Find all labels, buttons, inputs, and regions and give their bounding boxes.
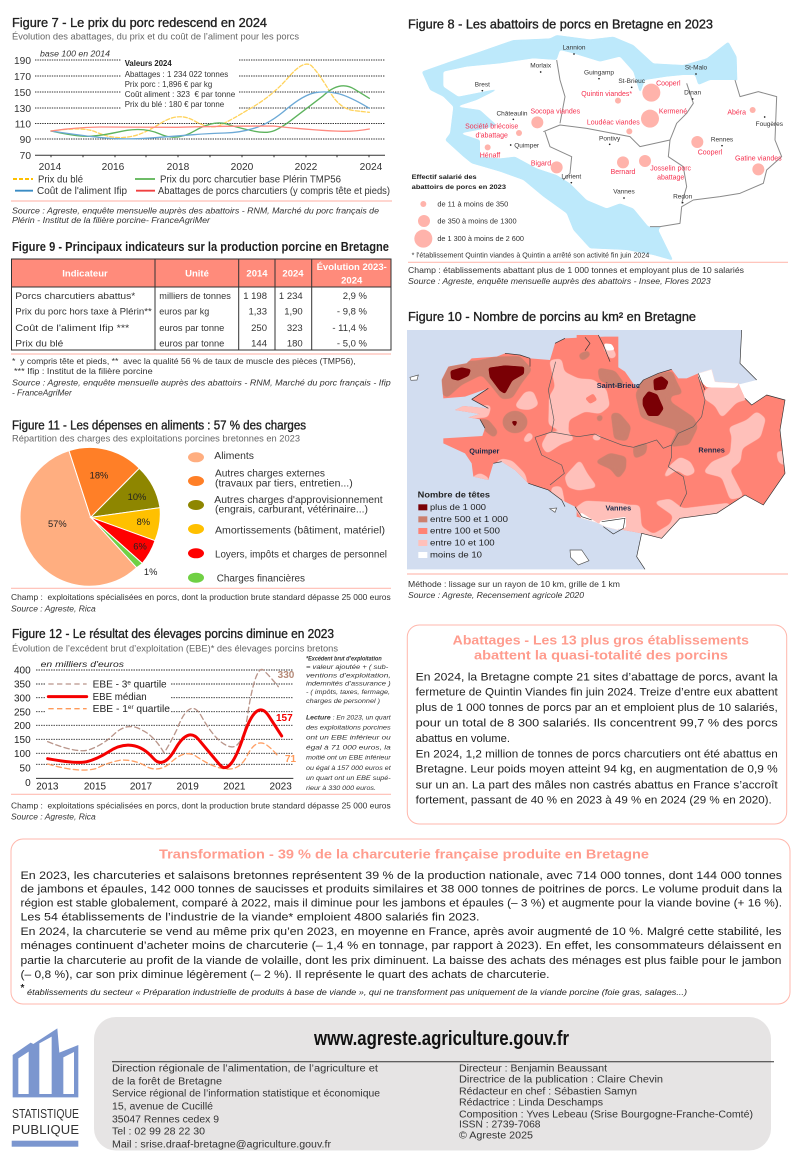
map: slaughterhouses in Brittany: Pontivy <box>599 135 621 142</box>
text block: publication credits: Rédactrice : Linda Deschamps <box>459 1098 603 1108</box>
map: slaughterhouses in Brittany: Quintin viandes* <box>581 91 632 98</box>
source: figure 10 <box>408 579 620 600</box>
map: slaughterhouses in Brittany: Quimper <box>514 143 540 150</box>
line chart: EBE quartiles: 400 <box>14 666 31 677</box>
map: slaughterhouses in Brittany: abattage <box>657 175 684 182</box>
line chart: indices base 100: 70 <box>20 151 31 162</box>
line chart: indices base 100: 2014 <box>39 162 62 173</box>
legend: employee count circles <box>412 174 649 259</box>
text block: processing box body: Les 54 établissements de l’industrie de la viande* emploient 4800 salariés fin 2023. <box>20 912 480 924</box>
legend: EBE: er <box>128 705 134 711</box>
legend: figure 7: Prix du blé <box>38 174 83 186</box>
legend: pie chart: (travaux par tiers, entretien...) <box>215 478 353 490</box>
legend: head count classes: entre 500 et 1 000 <box>430 514 508 524</box>
legend: pie chart: Amortissements (bâtiment, matériel) <box>215 526 385 537</box>
pie chart: charges: 8% <box>137 517 150 527</box>
text block: EBE definition and reading note: indemnités d’assurance ) <box>306 681 391 688</box>
text block: address: Direction régionale de l’alimentation, de l’agriculture et <box>112 1064 378 1074</box>
line chart: EBE quartiles: 2013 <box>36 781 59 792</box>
text block: slaughter box body: sur un an. La part des mâles non castrés abattus en France s’accroît <box>416 779 778 791</box>
text block: slaughter box body: pour un total de 8 300 salariés. Ils concentrent 99,7 % des porcs <box>416 718 778 730</box>
heading: slaughter box: Abattages - Les 13 plus gros établissements <box>453 632 749 648</box>
source: figure 12: Source : Agreste, Rica <box>11 812 96 822</box>
text block: processing box body: partie la charcuterie au profit de la viande de volaille, dont les prix diminuent. La baisse des achats des ménages est plus faible pour le jambon <box>20 955 782 967</box>
map: slaughterhouses in Brittany: Bernard <box>611 169 636 176</box>
map: slaughterhouses in Brittany: Bigard <box>531 161 551 168</box>
table: indicators: euros par tonne <box>159 323 224 334</box>
panel: figure 8 slaughterhouse map <box>408 18 788 286</box>
pie chart: charges: 18% <box>90 471 108 481</box>
notes and source: figure 9: - FranceAgriMer <box>12 388 73 398</box>
map: slaughterhouses in Brittany: Cooperl <box>698 150 723 157</box>
logo: Statistique Publique <box>12 1028 79 1147</box>
line chart: indices base 100: 90 <box>20 135 31 146</box>
legend: EBE: quartile <box>131 679 167 690</box>
table: indicators <box>12 259 391 350</box>
pie chart: charges: 57% <box>48 519 67 529</box>
table: indicators: Porcs charcutiers abattus* <box>15 291 136 302</box>
map: slaughterhouses in Brittany: St-Brieuc <box>618 78 646 85</box>
line chart: EBE quartiles: 157 <box>276 713 293 724</box>
line chart: indices base 100: 2018 <box>167 162 190 173</box>
table: indicators: 323 <box>287 323 303 334</box>
table: indicators: Coût de l'aliment Ifip *** <box>15 323 130 334</box>
line chart: indices base 100: 2020 <box>231 162 254 173</box>
map: slaughterhouses in Brittany: Gatine viandes <box>735 155 782 162</box>
text block: slaughter box body: fortement, passant de 40 % en 2023 à 49 % en 2024 (29 % en 2020). <box>416 795 772 807</box>
map: slaughterhouses in Brittany: Cooperl <box>656 81 681 88</box>
line chart: indices base 100 <box>14 48 385 173</box>
table: indicators: - 5,0 % <box>337 338 368 350</box>
legend: head count classes <box>418 490 508 560</box>
table: indicators: 1 198 <box>243 291 267 302</box>
source: figure 11: Source : Agreste, Rica <box>11 604 96 614</box>
line chart: EBE quartiles: 100 <box>14 749 31 760</box>
legend: EBE: quartile <box>134 704 170 715</box>
legend: pie chart: Aliments <box>214 451 254 462</box>
callout: 2024 values <box>125 58 235 109</box>
notes and source: figure 9: * y compris tête et pieds, ** avec la qualité 56 % de taux de muscle des pièces (TMP56), <box>12 356 356 366</box>
source: figure 10: Méthode : lissage sur un rayon de 10 km, grille de 1 km <box>408 579 620 589</box>
line chart: EBE quartiles: 150 <box>14 735 31 746</box>
text block: publication credits: Directeur : Benjamin Beaussant <box>459 1064 607 1074</box>
heading: figure 7: Figure 7 - Le prix du porc redescend en 2024 <box>12 16 267 30</box>
heading: slaughter box <box>453 632 749 662</box>
legend: head count classes: Nombre de têtes <box>418 490 491 499</box>
line chart: indices base 100: 2016 <box>102 162 125 173</box>
map: pigs per square kilometre: Saint-Brieuc <box>597 381 640 390</box>
line chart: EBE quartiles: 2015 <box>84 781 107 792</box>
text block: slaughter box body <box>416 671 779 807</box>
callout: 2024 values: Valeurs 2024 <box>125 58 172 68</box>
text block: publication credits: Directrice de la publication : Claire Chevin <box>459 1074 663 1086</box>
line chart: EBE quartiles: 2017 <box>130 781 153 792</box>
line chart: indices base 100: 190 <box>14 56 31 67</box>
table: indicators: 2024 <box>341 276 363 286</box>
table: indicators: 2,9 % <box>343 291 368 302</box>
callout: 2024 values: Prix porc : 1,896 € par kg <box>125 79 212 89</box>
panel: figure 9 indicators table <box>11 240 391 398</box>
line chart: indices base 100: base 100 en 2014 <box>40 48 110 58</box>
table: indicators: 2014 <box>246 268 268 280</box>
panel: figure 11 feed cost pie chart <box>11 418 391 614</box>
line chart: EBE quartiles: 300 <box>14 693 31 704</box>
map: slaughterhouses in Brittany: Rennes <box>711 137 734 144</box>
source: figure 12 <box>11 800 391 822</box>
map: slaughterhouses in Brittany: Lorient <box>561 174 581 181</box>
source: figure 8: Champ : établissements abattant plus de 1 000 tonnes et employant plus de 10 salariés <box>408 265 744 275</box>
legend: employee count circles: abattoirs de porcs en 2023 <box>412 184 506 191</box>
callout: 2024 values: Abattages : 1 234 022 tonnes <box>125 69 228 79</box>
map: slaughterhouses in Brittany: Redon <box>673 194 693 201</box>
text block: slaughter box body: abattus en volume. <box>416 733 510 745</box>
panel: figure 10 pig density map <box>400 310 800 600</box>
legend: pie chart: Charges financières <box>217 574 305 584</box>
text block: processing box body: En 2023, les charcuteries et salaisons bretonnes représentent 39 % de la production nationale, avec 714 000 tonnes, dont 144 000 tonnes <box>20 870 783 882</box>
table: indicators: milliers de tonnes <box>159 291 231 302</box>
text block: address: 15, avenue de Cucillé <box>112 1102 213 1112</box>
map: slaughterhouses in Brittany: Vannes <box>613 188 636 195</box>
map: slaughterhouses in Brittany: Josselin porc <box>650 166 692 173</box>
heading: figure 10: Figure 10 - Nombre de porcins au km² en Bretagne <box>408 310 696 324</box>
logo: Statistique Publique: STATISTIQUE <box>12 1106 79 1121</box>
map: slaughterhouses in Brittany: Société briécoise <box>465 123 518 130</box>
map: slaughterhouses in Brittany: Kermené <box>659 108 687 115</box>
pie chart: charges: 1% <box>144 567 157 577</box>
legend: pie chart: Autres charges d'approvisionnement <box>214 495 383 506</box>
line chart: indices base 100: 2024 <box>360 162 383 173</box>
text block: processing box body: (– 0,8 %), car son prix diminue légèrement (– 2 %). Il représente le quart des achats de charcuterie. <box>20 969 550 981</box>
text block: address <box>112 1064 380 1150</box>
table: indicators: euros par kg <box>159 307 209 318</box>
legend: pie chart: Autres charges externes <box>215 468 325 480</box>
line chart: EBE quartiles: 250 <box>14 707 31 718</box>
subtitle: figure 11: Répartition des charges des exploitations porcines bretonnes en 2023 <box>12 434 300 444</box>
line chart: EBE quartiles: 330 <box>278 670 295 681</box>
legend: figure 7: Coût de l'aliment Ifip <box>37 186 127 197</box>
text block: publication credits: ISSN : 2739-7068 <box>459 1120 541 1130</box>
map: pigs per square kilometre: Vannes <box>605 504 631 513</box>
line chart: indices base 100: 170 <box>14 72 31 83</box>
text block: address: Service régional de l’information statistique et économique <box>112 1088 380 1100</box>
text block: EBE definition and reading note: *Excédent brut d’exploitation <box>306 656 382 663</box>
text block: EBE definition and reading note: charges de personnel ) <box>306 698 380 705</box>
line chart: EBE quartiles: 0 <box>25 778 31 789</box>
legend: figure 7: Abattages de porcs charcutiers (y compris tête et pieds) <box>158 186 390 197</box>
line chart: indices base 100: 110 <box>15 120 31 130</box>
callout: 2024 values: Coût aliment : 323 € par tonne <box>125 89 235 99</box>
text block: publication credits: Composition : Yves Lebeau (Srise Bourgogne-Franche-Comté) <box>459 1110 753 1120</box>
text block: processing box body: de jambons et épaules, 142 000 tonnes de saucisses et produits similaires et 38 000 tonnes de poitrines de porcs. Le volume produit dans la <box>20 883 783 895</box>
line chart: EBE quartiles: 350 <box>14 680 31 691</box>
legend: head count classes: entre 10 et 100 <box>430 538 495 548</box>
legend: head count classes: entre 100 et 500 <box>430 526 500 536</box>
legend: EBE <box>48 679 170 715</box>
map: slaughterhouses in Brittany: d'abattage <box>475 132 508 139</box>
table: indicators: 1 234 <box>279 291 303 302</box>
source: figure 7 <box>12 206 379 225</box>
legend: employee count circles: de 11 à moins de 350 <box>437 202 508 209</box>
map: pigs per square kilometre <box>400 327 800 573</box>
heading: figure 8: Figure 8 - Les abattoirs de porcs en Bretagne en 2023 <box>408 18 713 32</box>
table: indicators: Prix du blé <box>15 338 63 350</box>
logo: Statistique Publique: PUBLIQUE <box>12 1122 79 1137</box>
table: indicators: euros par tonne <box>159 338 224 350</box>
map: slaughterhouses in Brittany: Morlaix <box>530 63 552 70</box>
pie chart: charges: 10% <box>128 492 146 502</box>
table: indicators: Évolution 2023- <box>317 262 387 273</box>
text block: address: de la forêt de Bretagne <box>112 1076 222 1088</box>
line chart: EBE quartiles: 71 <box>285 754 297 765</box>
text block: EBE definition and reading note: = valeur ajoutée + ( sub- <box>306 664 389 671</box>
panel: figure 12 EBE line chart <box>11 627 392 822</box>
legend: employee count circles: de 350 à moins de 1300 <box>437 219 517 226</box>
map: slaughterhouses in Brittany: Abéra <box>727 109 746 116</box>
text block: address: Mail : srise.draaf-bretagne@agriculture.gouv.fr <box>112 1140 332 1150</box>
map: slaughterhouses in Brittany: St-Malo <box>685 65 708 72</box>
map: slaughterhouses in Brittany: Loudéac viandes <box>587 120 640 127</box>
legend: head count classes: plus de 1 000 <box>430 502 486 512</box>
legend: EBE: e <box>127 680 132 686</box>
legend: employee count circles: Effectif salarié des <box>412 174 477 181</box>
text block: processing box body: ménages continuent d’acheter moins de charcuterie (– 1,4 % en tonnage, par rapport à 2023). En effet, les consommateurs délaissent en <box>20 940 782 952</box>
line chart: EBE quartiles: 50 <box>20 763 31 774</box>
callout: 2024 values: Prix du blé : 180 € par tonne <box>125 99 224 109</box>
legend: EBE: EBE médian <box>93 692 147 703</box>
legend: head count classes: moins de 10 <box>430 550 482 560</box>
text block: publication credits: © Agreste 2025 <box>459 1130 533 1142</box>
heading: figure 12: Figure 12 - Le résultat des élevages porcins diminue en 2023 <box>12 627 334 641</box>
map: slaughterhouses in Brittany: Hénaff <box>480 153 500 160</box>
legend: EBE: EBE - 3 <box>93 679 126 690</box>
source: figure 8: Source : Agreste, enquête mensuelle auprès des abattoirs - Insee, Flores 2023 <box>408 276 711 286</box>
footnote: processing box <box>20 983 687 997</box>
map: slaughterhouses in Brittany: Fougères <box>756 121 784 128</box>
table: indicators: 144 <box>251 338 267 350</box>
text block: slaughter box body: En 2024, 1,2 million de tonnes de porcs charcutiers ont été abattus en <box>416 748 778 760</box>
map: slaughterhouses in Brittany: Lannion <box>562 45 586 52</box>
map: pigs per square kilometre: Rennes <box>698 446 725 455</box>
heading: figure 11: Figure 11 - Les dépenses en aliments : 57 % des charges <box>12 418 306 432</box>
source: figure 10: Source : Agreste, Recensement agricole 2020 <box>408 590 584 600</box>
line chart: indices base 100: 2022 <box>295 162 318 173</box>
text block: slaughter box body: En 2024, la Bretagne compte 21 sites d’abattage de porcs, avant la <box>416 671 779 683</box>
line chart: EBE quartiles: 2023 <box>270 781 292 792</box>
text block: publication credits <box>459 1064 753 1142</box>
map: slaughterhouses in Brittany: Dinan <box>684 90 702 97</box>
source: figure 8 <box>408 265 744 286</box>
table: indicators: 250 <box>251 323 267 334</box>
map: slaughterhouses in Brittany: Socopa viandes <box>530 108 581 115</box>
heading: processing box: Transformation - 39 % de la charcuterie française produite en Bretagne <box>159 846 649 862</box>
notes and source: figure 9 <box>12 356 391 398</box>
source: figure 12: Champ : exploitations spécialisées en porcs, dont la production brute standard dépasse 25 000 euros <box>11 800 391 810</box>
table: indicators: 180 <box>287 338 303 350</box>
subtitle: figure 7: Évolution des abattages, du prix et du coût de l’aliment pour les porcs <box>12 32 299 42</box>
text block: EBE definition and reading note: - ( impôts, taxes, fermage, <box>306 689 390 696</box>
table: indicators: 2024 <box>282 268 304 280</box>
line chart: EBE quartiles <box>14 659 297 792</box>
text block: slaughter box body: Bretagne. Leur poids moyen atteint 94 kg, en augmentation de 0,9 % <box>416 764 778 776</box>
text block: EBE definition and reading note: rieur à 330 000 euros. <box>306 785 376 792</box>
source: figure 7: Plérin - Institut de la filière porcine- FranceAgriMer <box>12 215 211 225</box>
map: slaughterhouses in Brittany: Brest <box>475 81 490 88</box>
map: slaughterhouses in Brittany: Châteaulin <box>496 110 528 117</box>
text block: address: 35047 Rennes cedex 9 <box>112 1114 219 1126</box>
legend: pie chart: (engrais, carburant, vétérinaire...) <box>215 504 368 516</box>
panel: slaughter text box <box>407 625 787 824</box>
table: indicators: Unité <box>185 268 209 280</box>
website address: www.agreste.agriculture.gouv.fr <box>313 1028 569 1050</box>
text block: EBE definition and reading note: un quart ont un EBE supé- <box>306 775 391 782</box>
line chart: EBE quartiles: en milliers d'euros <box>41 659 124 669</box>
legend: pie chart <box>188 451 387 584</box>
text block: EBE definition and reading note: égal à 71 000 euros, la <box>306 745 391 752</box>
text block: address: Tel : 02 99 28 22 30 <box>112 1126 205 1138</box>
text block: EBE definition and reading note: ou égal à 157 000 euros et <box>306 765 392 772</box>
text block: publication credits: Rédacteur en chef : Sébastien Samyn <box>459 1086 637 1098</box>
heading: slaughter box: abattent la quasi-totalité des porcins <box>474 648 728 662</box>
panel: processing text box <box>11 839 790 1004</box>
table: indicators: 1,90 <box>284 307 303 318</box>
footnote: processing box: établissements du secteur « Préparation industrielle de produits à base de viande », qui ne transforment pas uniquement de la viande porcine (foie gras, salages...) <box>27 987 687 997</box>
table: indicators: Indicateur <box>62 268 108 280</box>
source: figure 11 <box>11 592 391 614</box>
panel: footer contact block <box>94 1017 774 1150</box>
text block: slaughter box body: plus de 1 000 tonnes de porcs par an et emploient plus de 10 salariés, <box>416 702 778 714</box>
source: figure 11: Champ : exploitations spécialisées en porcs, dont la production brute standard dépasse 25 000 euros <box>11 592 391 602</box>
text block: EBE definition and reading note: ont un EBE inférieur ou <box>306 735 391 742</box>
line chart: EBE quartiles: 2021 <box>223 781 246 792</box>
source: figure 7: Source : Agreste, enquête mensuelle auprès des abattoirs - RNM, Marché du porc français de <box>12 206 379 216</box>
text block: EBE definition and reading note: des exploitations porcines <box>306 725 391 732</box>
text block: EBE definition and reading note: Lecture : En 2023, un quart <box>306 714 392 721</box>
line chart: EBE quartiles: 200 <box>14 721 31 732</box>
legend: EBE: EBE - 1 <box>93 704 126 715</box>
text block: processing box body: région est stable globalement, comparé à 2022, mais il diminue pour les jambons et épaules (– 3 %) et augmente pour la viande bovine (+ 16 %). <box>20 898 782 910</box>
text block: EBE definition and reading note: moitié ont un EBE inférieur <box>306 755 391 762</box>
pie chart: charges <box>20 447 160 586</box>
legend: employee count circles: * l'établissement Quintin viandes à Quintin a arrêté son activité fin juin 2024 <box>412 252 649 259</box>
footnote: processing box: * <box>20 983 24 994</box>
legend: employee count circles: de 1 300 à moins de 2 600 <box>437 236 524 243</box>
table: indicators: - 9,8 % <box>337 307 368 318</box>
line chart: indices base 100: 130 <box>14 104 31 115</box>
text block: slaughter box body: fermeture de Quintin Viandes fin juin 2024. Treize d’entre eux abattent <box>416 687 778 699</box>
text block: EBE definition and reading note: ventions d’exploitation, <box>306 672 391 679</box>
heading: figure 9: Figure 9 - Principaux indicateurs sur la production porcine en Bretagne <box>12 240 389 254</box>
pie chart: charges: 6% <box>133 541 147 551</box>
legend: figure 7: Prix du porc charcutier base Plérin TMP56 <box>160 174 341 186</box>
legend: figure 7 <box>13 174 390 197</box>
panel: figure 7 pork price line chart <box>11 16 392 225</box>
notes and source: figure 9: Source : Agreste, enquête mensuelle auprès des abattoirs - RNM, Marché du porc français - Ifip <box>12 378 391 388</box>
line chart: EBE quartiles: 2019 <box>177 781 199 792</box>
text block: processing box body <box>20 870 783 981</box>
notes and source: figure 9: *** Ifip : Institut de la filière porcine <box>14 366 153 376</box>
legend: pie chart: Loyers, impôts et charges de personnel <box>215 550 387 560</box>
map: slaughterhouses in Brittany: Guingamp <box>584 69 614 76</box>
table: indicators: Prix du porc hors taxe à Plérin** <box>15 307 152 318</box>
table: indicators: - 11,4 % <box>332 323 368 334</box>
line chart: indices base 100: 150 <box>14 88 31 99</box>
map: slaughterhouses in Brittany <box>412 35 784 261</box>
subtitle: figure 12: Évolution de l’excédent brut d’exploitation (EBE)* des élevages porcins bretons <box>12 644 338 654</box>
table: indicators: 1,33 <box>248 307 267 318</box>
text block: processing box body: En 2024, la charcuterie se vend au même prix qu’en 2023, en moyenne en France, après avoir augmenté de 10 %. Malgré cette stabilité, les <box>20 926 782 938</box>
map: pigs per square kilometre: Quimper <box>469 446 500 455</box>
text block: EBE definition and reading note <box>306 656 392 792</box>
